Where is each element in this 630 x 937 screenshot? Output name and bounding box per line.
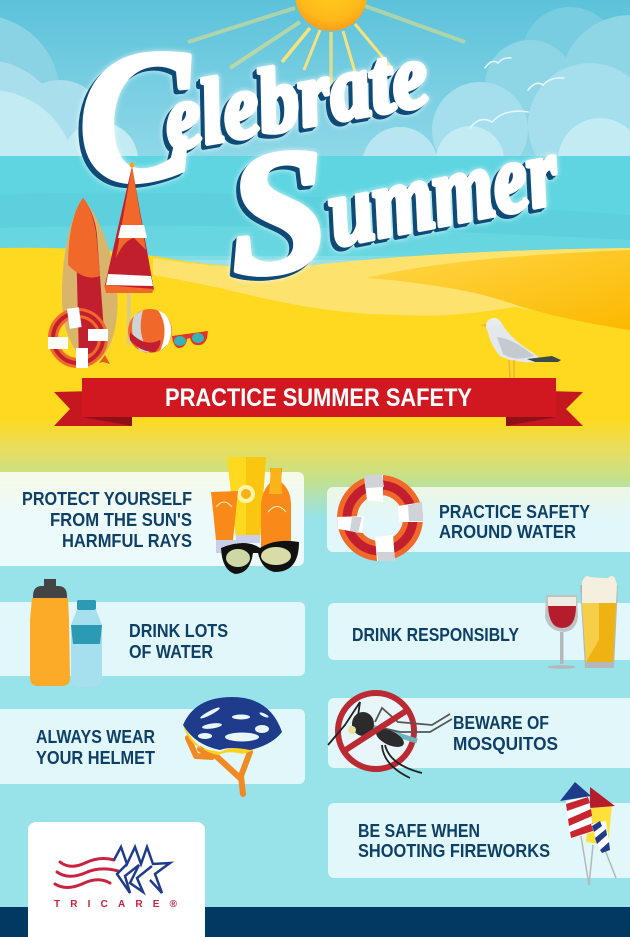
ribbon banner: [54, 378, 583, 426]
panel: helmet: [0, 697, 305, 794]
sun: [295, 0, 367, 31]
heading: water: OF WATER: [129, 642, 213, 662]
heading: sun protection: PROTECT YOURSELF: [22, 489, 192, 509]
icon: sports bottle: [30, 579, 70, 686]
Celebrate: C: [70, 9, 203, 224]
heading: mosquitos: MOSQUITOS: [453, 734, 558, 754]
icon: wine glass: [545, 595, 578, 669]
heading: helmet: ALWAYS WEAR: [36, 727, 155, 747]
heading: mosquitos: BEWARE OF: [453, 713, 549, 733]
seagull: [480, 318, 561, 378]
icon: no mosquitos: [328, 693, 452, 778]
panel: water safety: [327, 474, 630, 561]
sun rays: [188, 6, 465, 90]
lower background: [0, 518, 630, 908]
panel: drink responsibly: [328, 576, 630, 669]
surfboard: [62, 198, 118, 362]
panel: mosquitos: [328, 693, 630, 778]
logo: waves: [55, 859, 118, 888]
heading: helmet: YOUR HELMET: [36, 748, 155, 768]
panel: sun protection: [0, 457, 304, 574]
heading: water safety: AROUND WATER: [439, 522, 576, 542]
background: sky: [0, 0, 630, 160]
panel: water: [0, 579, 305, 687]
panel: logo box: [28, 822, 205, 937]
birds: [470, 58, 564, 128]
heading: sun protection: [22, 489, 192, 551]
heading: drink responsibly: DRINK RESPONSIBLY: [352, 625, 519, 645]
clouds: [0, 7, 630, 260]
heading: water safety: PRACTICE SAFETY: [439, 502, 590, 522]
sea: [0, 156, 630, 260]
heading: fireworks: [358, 821, 550, 861]
logo: wordmark: TRICARE®: [54, 899, 178, 910]
icon: water bottle: [71, 600, 102, 687]
Summer: [220, 111, 568, 314]
Celebrate: [70, 9, 435, 224]
heading: helmet: [36, 727, 155, 768]
icon: fireworks: [560, 782, 616, 885]
panel: fireworks: [328, 782, 630, 885]
icon: beer glass: [580, 576, 618, 668]
heading: water: [129, 621, 228, 662]
icon: sunscreen and sunglasses: [211, 457, 299, 574]
sand: [0, 248, 630, 430]
life ring, beach: [48, 307, 110, 368]
beach ball: [128, 309, 172, 353]
heading: water safety: [439, 502, 590, 542]
heading: sun protection: FROM THE SUN'S: [50, 510, 192, 530]
heading: mosquitos: [453, 713, 558, 754]
sunglasses, beach: [172, 331, 208, 348]
Summer: ummer: [319, 117, 568, 268]
heading: fireworks: BE SAFE WHEN: [358, 821, 480, 841]
Celebrate: elebrate: [156, 23, 435, 170]
icon: life ring: [337, 474, 423, 561]
heading: water: DRINK LOTS: [129, 621, 228, 641]
title: Celebrate Summer: [70, 9, 568, 314]
icon: bike helmet: [183, 697, 282, 794]
banner text: PRACTICE SUMMER SAFETY: [165, 384, 472, 412]
heading: sun protection: HARMFUL RAYS: [62, 531, 192, 551]
footer band: [0, 907, 630, 937]
beach umbrella: [104, 162, 154, 345]
lower background gradient: [0, 418, 630, 518]
logo: stars: [114, 847, 170, 893]
heading: fireworks: SHOOTING FIREWORKS: [358, 841, 550, 861]
Summer: S: [220, 111, 335, 314]
